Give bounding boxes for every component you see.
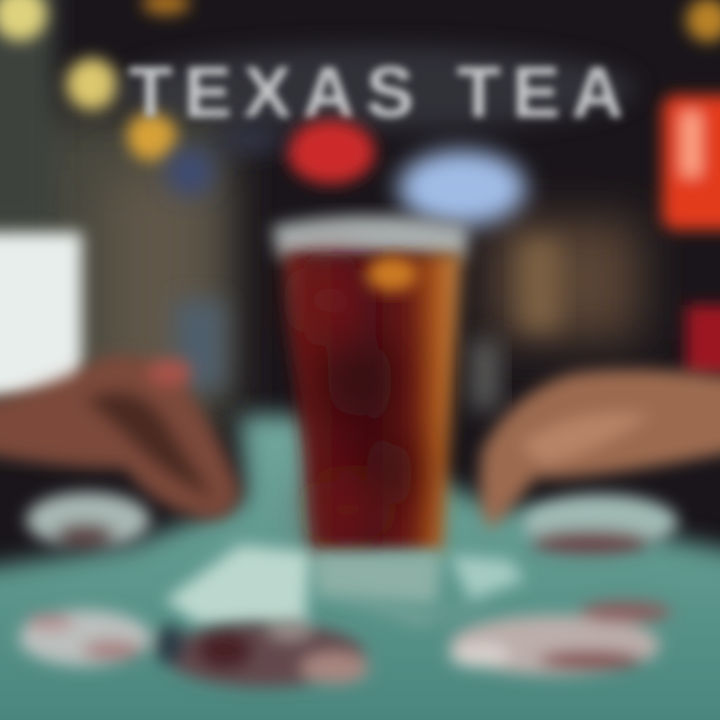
left hand <box>0 355 240 519</box>
chips: right stack <box>522 494 678 550</box>
glass rim <box>272 216 468 258</box>
tea <box>284 254 462 552</box>
chips: bottom left <box>19 610 151 666</box>
red logo blob <box>287 120 375 184</box>
cards on table <box>165 545 525 625</box>
right hand <box>480 370 720 530</box>
orange reflection <box>366 256 418 292</box>
poker chips <box>19 492 678 687</box>
blue light blob <box>166 128 526 226</box>
white panel left <box>0 232 82 397</box>
glass base <box>312 552 442 604</box>
neon sign right <box>662 95 720 375</box>
chips: upper left <box>26 492 150 548</box>
bokeh lights <box>0 0 720 161</box>
table surface <box>0 380 720 720</box>
mottled dark patches in the tea <box>304 266 414 540</box>
glass of tea <box>272 216 468 604</box>
title: TEXAS TEA <box>128 53 624 133</box>
chips: bottom right <box>450 615 660 675</box>
chips: bottom centre <box>165 623 365 687</box>
